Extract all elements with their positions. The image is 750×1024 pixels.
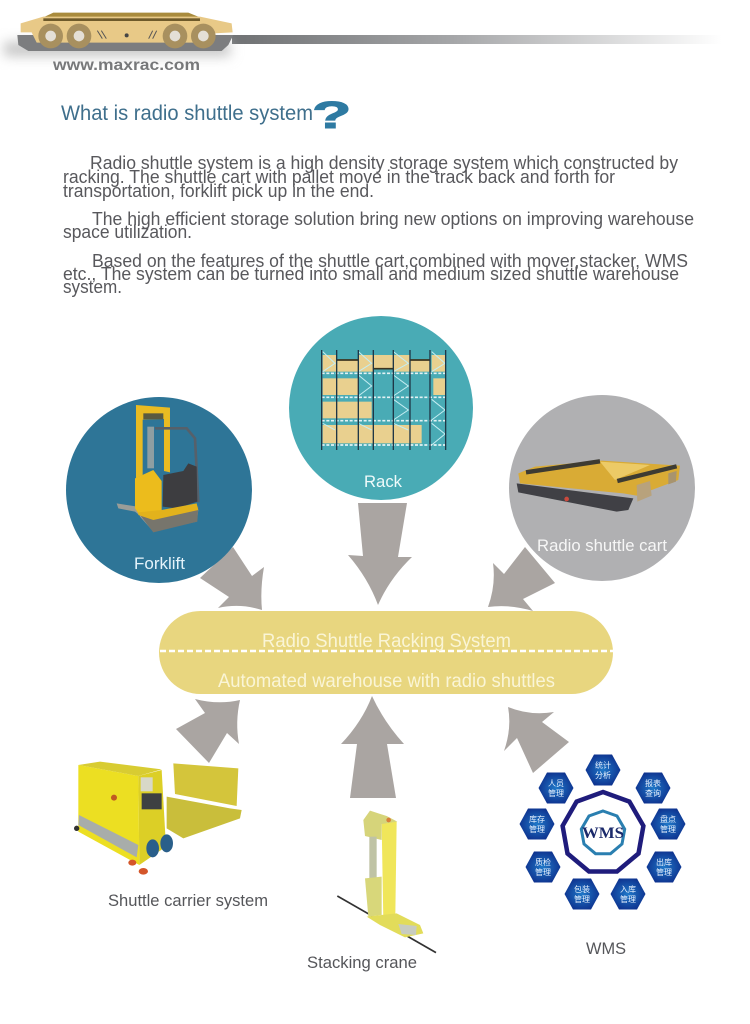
dashed divider — [160, 650, 613, 652]
module: outbound — [646, 852, 682, 882]
module: personnel — [538, 772, 574, 804]
label: WMS: WMS — [586, 939, 626, 958]
module: packing: 管理 — [574, 894, 590, 904]
paragraph 1 — [63, 153, 678, 201]
panel: stacking crane — [307, 811, 436, 972]
module: packing: 包装 — [574, 884, 590, 894]
paragraph 2: space utilization. — [63, 222, 192, 242]
header gradient rule — [232, 35, 722, 44]
module: quality inspection: 管理 — [535, 867, 551, 877]
module: quality inspection: 质检 — [535, 857, 551, 867]
module: statistics: 统计 — [595, 760, 611, 770]
panel: central system pill — [159, 611, 613, 694]
outer ring — [563, 792, 643, 872]
module: statistics — [586, 754, 620, 786]
arrow: forklift to centre — [200, 547, 264, 610]
heading: radio shuttle racking system: Radio Shuttle Racking System — [262, 631, 511, 652]
panel: shuttle carrier system — [74, 762, 268, 910]
module: outbound: 管理 — [656, 867, 672, 877]
paragraph 3: Based on the features of the shuttle cart,combined with mover,stacker, WMS — [92, 251, 688, 271]
icon: question mark: ? — [312, 94, 351, 137]
label: stacking crane: Stacking crane — [307, 953, 417, 972]
arrow: rack to centre — [348, 503, 412, 605]
icon: shuttle cart side view — [17, 13, 233, 51]
paragraph 1: transportation, forklift pick up in the end. — [63, 181, 374, 201]
module: outbound: 出库 — [656, 857, 672, 867]
panel: forklift circle — [66, 397, 252, 583]
shuttle drop shadow — [4, 42, 230, 56]
arrow: shuttle carrier to centre — [176, 699, 240, 763]
module: inventory: 库存 — [529, 814, 545, 824]
arrow: WMS to centre — [504, 707, 569, 773]
paragraph 3: system. — [63, 277, 122, 297]
module: reports — [636, 772, 670, 804]
header: shuttle logo and rule — [4, 13, 722, 56]
paragraph 3: etc., The system can be turned into small and medium sized shuttle warehouse — [63, 264, 679, 284]
text block: description — [63, 153, 694, 297]
title: What is radio shuttle system — [61, 102, 313, 125]
inner ring — [581, 811, 625, 854]
panel: rack circle — [289, 316, 473, 500]
label: rack: Rack — [364, 472, 402, 491]
paragraph 1: racking. The shuttle cart with pallet move in the track back and forth for — [63, 167, 615, 187]
circle background — [509, 395, 695, 581]
module: personnel: 管理 — [548, 788, 564, 798]
module: stocktaking — [650, 808, 686, 840]
module: inbound: 入库 — [620, 884, 636, 894]
panel: radio shuttle cart circle — [509, 395, 695, 581]
module: stocktaking: 管理 — [660, 824, 676, 834]
paragraph 2 — [63, 209, 694, 242]
subheading: automated warehouse: Automated warehouse with radio shuttles — [218, 671, 555, 692]
arrow: radio shuttle cart to centre — [488, 547, 555, 611]
icon: WMS hub — [563, 792, 643, 872]
module: stocktaking: 盘点 — [660, 814, 676, 824]
arrow: stacking crane to centre — [341, 696, 404, 798]
circle background — [66, 397, 252, 583]
module: statistics: 分析 — [595, 770, 611, 780]
paragraph 1: Radio shuttle system is a high density storage system which constructed by — [90, 153, 678, 173]
icon: stacking crane — [337, 811, 436, 953]
label: shuttle carrier system: Shuttle carrier system — [108, 891, 268, 910]
paragraph 2: The high efficient storage solution bring new options on improving warehouse — [92, 209, 694, 229]
WMS lettering: WMS — [582, 825, 624, 842]
module: personnel: 人员 — [548, 779, 564, 788]
paragraph 3 — [63, 251, 688, 297]
module: inventory — [520, 808, 554, 840]
module: inventory: 管理 — [529, 824, 545, 834]
module: reports: 报表 — [645, 778, 661, 788]
pill background — [159, 611, 613, 694]
label: radio shuttle cart: Radio shuttle cart — [537, 536, 667, 555]
module: inbound — [610, 878, 646, 910]
icon: storage rack — [322, 350, 446, 450]
module: packing — [564, 878, 600, 910]
module: quality inspection — [526, 852, 560, 882]
label: forklift: Forklift — [134, 554, 185, 573]
website address: www.maxrac.com — [52, 57, 200, 74]
icon: radio shuttle cart — [517, 461, 680, 512]
module: inbound: 管理 — [620, 894, 636, 904]
icon: shuttle carrier — [74, 762, 242, 875]
panel: WMS — [520, 754, 686, 958]
icon: forklift — [117, 405, 198, 532]
circle background — [289, 316, 473, 500]
module: reports: 查询 — [645, 788, 661, 798]
